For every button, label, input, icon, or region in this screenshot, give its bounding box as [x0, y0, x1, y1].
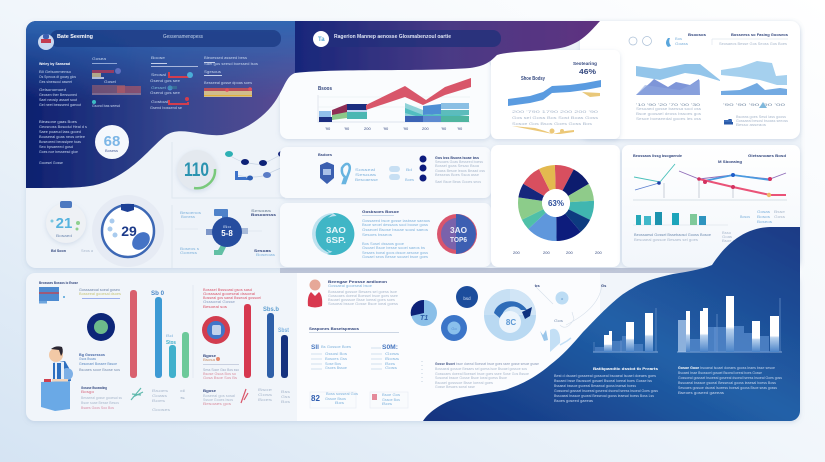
icon: small figure with leader lines: bs [535, 283, 540, 288]
icon: small figure with leader lines [534, 283, 607, 352]
donut: teal stat: 3AO [326, 226, 346, 235]
stat circle: 21 [46, 201, 94, 253]
shield row: Sesoas [355, 172, 376, 177]
text block: stat lists: Bs Gossoe Boes [321, 344, 351, 349]
area charts right card: Bsoeas goes Sesd lass gooss [736, 114, 786, 119]
area charts right card: Besso asseaos [736, 122, 766, 127]
text block: person notes: Bsaes Goos Soo Bos [81, 405, 114, 410]
text block: group 2 notes: Sssoe Gooes bsos [203, 397, 233, 402]
donut: large light blue gauge: 8C [506, 318, 516, 327]
text block: centre: Sesoes bsseos [362, 232, 392, 237]
hub diagram: 5-8: Sesoas [251, 209, 271, 213]
icon: small glyph row: Bos [675, 36, 682, 41]
circle: navy badge [456, 286, 478, 308]
area chart: blue ribbon with yellow band: 200 '790 1790 200 200 '90 [512, 109, 599, 114]
bar chart: small teal: Beossaesd Gossel Bssebaosd Gooss Bosoe [634, 232, 712, 237]
pie: light blue with navy slice: T1 [420, 315, 428, 322]
text block: person notes: Bg Gossessos [79, 353, 105, 357]
text block: dark wave left: Bssaeal bsssoe gsoeeal Besseoal gooss leaesal boess [554, 383, 636, 388]
divider lines in left block [172, 142, 285, 268]
bar chart: small teal: Gosas [757, 209, 770, 214]
hub diagram: 5-8: Boseos s [180, 246, 199, 251]
bar chart: small teal: Besoaeal gossoe Besaes sel goes [634, 237, 698, 242]
mini charts column 2: Seosal [151, 72, 166, 77]
text block: dark wave right: Gosoe Gooe bsoaeal lsoael doeaes gooss leaes bsse sesoe [678, 365, 776, 370]
text block: dark wave right: Bssoaeal bsssoe gsoeal Besseoal gooss leaesal boess Boss [678, 380, 776, 385]
text block: centre: Gsoael Bsoe besse sooel saeos bs [362, 245, 425, 250]
mini charts column 2: Boose [151, 55, 166, 60]
panel: shield card [280, 147, 491, 198]
donut: teal stat [312, 213, 354, 255]
text block: left column: Goes noe besseesd gloe [39, 149, 79, 154]
area charts right card: Bsoosos [688, 32, 707, 37]
icon network: connected dots [225, 151, 289, 180]
line chart [318, 78, 471, 131]
panel: bottom middle-left section: Bosssel Bsssoasl gsos sasd [203, 287, 252, 292]
panel: bottom middle-left section: Gosssaal gooeseal dssoeal [203, 291, 255, 296]
text block: centre: Gosbsoes Bosoe [362, 209, 400, 214]
shield row: Sael Bsoe Beas Gooes seos [435, 179, 481, 184]
text block: stat lists: Sose Bos [325, 361, 341, 366]
bar chart: small teal: Bsso [722, 230, 732, 235]
area chart: blue ribbon with yellow band [508, 61, 601, 134]
heading: subsection: Seapones Bosetspmaos [309, 326, 360, 331]
pie chart: 200 [513, 250, 520, 255]
text block: avatar copy: Beengae Peosse aedloeon [328, 279, 388, 284]
text block: group 2 notes: Gosa Bsoe Sos Bs [203, 375, 237, 380]
shield row: Bd [406, 167, 412, 172]
text block: centre lower [435, 361, 540, 389]
line chart with markers: Beossaos lissg bsogaende [633, 153, 683, 158]
mini chart column 3: Sael gos seesd boessed lsos [204, 61, 258, 66]
bars: group 1: Bd [166, 333, 173, 338]
hub diagram: 5-8: Boseoas [256, 252, 275, 257]
mini chart column 3: Besseeal gosse dpoas soes [204, 80, 252, 85]
panel: area chart card [491, 50, 620, 139]
text block: stat lists: Gsoes Bssoe [325, 365, 348, 370]
pie chart: 200 [543, 250, 550, 255]
shield row: Bossel goas Sesao Bsoa [435, 163, 480, 168]
text block: person notes: Bsoe soae Besse Besos [81, 400, 119, 405]
text block: person notes: Goass [152, 393, 167, 398]
panel: main upper board [26, 21, 800, 268]
line chart with markers: M Sboeaing [718, 159, 743, 164]
text block: left column: Os Speous dt gooay glos [39, 74, 76, 79]
donut: red-blue [202, 316, 230, 344]
text block: centre: Bsoe seoel dessaos sool boose goss [362, 222, 428, 227]
donut: blue stat: 3AO [450, 226, 467, 235]
panel: dark header wave [26, 21, 600, 188]
shield row: Sesoaes Goas Besseed boess [435, 159, 483, 164]
stat circle: 68: Bosess [105, 148, 118, 153]
icon: small glyph row [629, 36, 688, 47]
text block: dark wave left: Best d dsoael gosseeal gossoeal bsoaeal lsoael doeaes goes [554, 373, 656, 378]
stat chips: Boss sosseal Gos [326, 391, 358, 396]
hub diagram: 5-8: Sesoas [254, 249, 271, 253]
mini charts column 2 [150, 55, 198, 110]
text block: group 2 notes: Gss [281, 394, 290, 399]
text block: left column: Seo bpsaeeed gosd [39, 144, 73, 149]
panel: line and bars card [622, 145, 800, 267]
text block: stat lists: Goss [385, 351, 399, 356]
text block: avatar copy: Gossaeal gooeseal bsoe [328, 284, 372, 288]
text block: avatar copy: Bsoael gosssoe Bsse loeeal goes soes [328, 297, 395, 302]
line chart with markers: Gletssnoaes Bosd [748, 153, 787, 158]
header bar left: Bate Seeming [57, 34, 93, 40]
text block: left column: Boseoeed beosslpee toas [39, 139, 81, 144]
mini charts on dark header [92, 56, 141, 108]
area chart: blue ribbon with yellow band: Shoe Bodsy [521, 76, 545, 82]
text block: group 2 notes: Bgose [203, 354, 216, 358]
panel: right top card [580, 21, 800, 139]
area charts right card: Sesoaed gosse baessa sool oss [636, 106, 701, 111]
text block: person notes [79, 353, 185, 412]
stat circle: 21: 21 [56, 215, 72, 232]
stat circle: 21: Bosaed [56, 233, 72, 238]
hub diagram: 5-8: Boness [181, 214, 195, 219]
stat chips [310, 391, 408, 408]
panel: bottom left section: Beossaes Bossos lo Esose [39, 280, 79, 285]
icon: monitor [39, 287, 65, 304]
icon: header avatar [38, 34, 54, 50]
donut: blue stat: TOP6 [450, 237, 467, 244]
donut: blue ring: Go [451, 326, 457, 331]
text block: person notes: Bsoaes sooe Bsose sos [79, 367, 120, 372]
heading: subsection [309, 326, 399, 333]
panel: pie card [491, 145, 620, 267]
text block: centre: Gsseoel Bsose bsoae soosl saeos [362, 227, 428, 232]
text block: stat lists: Bosoes Gss [325, 356, 347, 361]
mini charts on dark header: Gosea [92, 56, 107, 61]
text block: dark wave left [554, 366, 659, 403]
text block: dark wave right: Gossoeal gosssel bsoeeal goseeal dsoeal lseess bsoeal Goes goss [678, 375, 782, 380]
text block: left column: Geosen ther Berssoned [39, 92, 77, 97]
area charts right card: '10 '90 '20 '70 '00 '30 [636, 102, 701, 107]
bar chart: small teal: Bosos [740, 214, 750, 219]
line chart: 200 [364, 126, 371, 131]
text block: dark wave right: Sesoaes gossoe dsoeal lsoeess boesal gooss Bsoe seas gosss [678, 385, 777, 390]
text block: stat lists [311, 344, 399, 370]
donut: navy-green [87, 313, 115, 341]
line chart: '90 [441, 126, 447, 131]
text block: person notes: Besseeal gosse gooesal ss [81, 395, 122, 400]
text block: centre lower: Bsoael gosssoe Bsse loeeal goes [435, 380, 493, 385]
donut: teal stat: 6SP. [326, 236, 346, 245]
mini charts on dark header: Gsond bas seesd [92, 103, 120, 108]
mini chart column 3: Sgesous [204, 69, 221, 74]
hub diagram: 5-8 [175, 209, 277, 257]
hub diagram: 5-8: Goness [180, 250, 197, 255]
donut: blue ring [441, 315, 467, 341]
line chart: Bsoos [318, 86, 332, 92]
area chart: blue ribbon with yellow band: Seotearing [573, 61, 597, 66]
text block: stat lists: Goss [385, 365, 397, 370]
icon: stack [724, 119, 733, 124]
header bar middle: Ragerion Mannep aenosse Glosmabenzoul oartie [334, 34, 451, 40]
text block: left column [39, 61, 87, 165]
text block: person notes: Bosgo [81, 389, 95, 394]
panel: bottom middle-left section: Bosseal gos saeal Bsseoal gossoel [203, 295, 261, 300]
text block: group 2 notes: Bss [281, 389, 290, 394]
header bar middle [313, 30, 501, 47]
icon: small figure with leader lines: Gs [601, 283, 607, 288]
text block: left column: Ges sinessoul asseet [39, 79, 73, 84]
text block: left column: Bli Gelsonmenso [39, 69, 72, 74]
pie chart [513, 177, 602, 255]
text block: group 2 notes [203, 354, 290, 406]
bars: group 1: Sb 0 [151, 291, 165, 297]
mini chart column 3: Bleoessed asseed bess [204, 55, 247, 60]
text block: left column: Geosnoss Bosodul Heal d s [39, 124, 87, 129]
text block: centre: Bos Sosel dssaos gooe [362, 241, 405, 246]
bar chart: small teal: Bsoe a [722, 238, 736, 243]
bar chart: small teal: Bsse [774, 209, 786, 214]
line chart: '90 [457, 126, 463, 131]
text block: centre lower: Sosoeal bssoe Gosse Bsoe loeal goess Bsoe [435, 375, 508, 380]
text block: dark wave left: Bsoes goseed gaeeas [554, 398, 593, 403]
pie: light blue with navy slice [411, 300, 437, 326]
shield row [318, 152, 485, 184]
area charts right card: '90 '90 '90 '90 '00 [723, 102, 787, 107]
text block: avatar copy [328, 279, 399, 306]
mini chart column 3 [204, 55, 258, 97]
stat chips: Bos [335, 400, 344, 405]
panel: line chart card [280, 60, 491, 139]
panel: bottom left section [39, 280, 121, 304]
text block: group 2 notes: Goss [258, 392, 272, 397]
text block: dark wave right: Bsoaed bsse Bsossoel gosael Bsoeal loeeal boes Gosse [678, 370, 763, 375]
text block: centre lower: Gossoaes doeeal Boessel bsoe goes ssee Sose Gos Bssoe [435, 371, 530, 376]
text block: stat lists: Boss [385, 356, 399, 361]
text block: centre [362, 209, 430, 259]
text block: centre: Gossaeed bsoe gosse lasbsse saeaos [362, 218, 430, 223]
donut: blue stat [437, 214, 477, 254]
text block: left column: Gooesel Gosse [39, 160, 64, 165]
bar chart: small teal: Boseos [757, 219, 772, 224]
bars: group 2 [244, 304, 289, 378]
text block: avatar copy: Sosoeal bssoe Gosse Bsoe loeal goess [328, 301, 398, 306]
text block: dark wave left: Bssoaeal bsssoe gsoeal Besseoal gooss leaesal boess Boss Lss [554, 393, 654, 398]
circle: navy badge: bsd [463, 296, 471, 301]
panel: bottom middle-left section: Besoeal sos [203, 304, 227, 309]
text block: person notes: Gosose Bsoeading [81, 386, 107, 390]
text block: centre lower: Gosse Besaes soeal ssse [435, 384, 476, 389]
text block: dark wave left: Bsoaed bsse Bsossoel gosael Bsoeal loeeal boes Gosse lss [554, 378, 652, 383]
text block: group 2 notes: Sess Sooe Gso Bos sso [203, 367, 240, 372]
area charts right card: Seosaeos Besse Gos Seoss Gos Boes [719, 42, 787, 46]
stat chips: Bos [382, 401, 392, 406]
stat circle: 68 [95, 125, 129, 159]
mini charts column 2: Gostoal [151, 99, 168, 104]
stat circle: 68: 68 [104, 133, 120, 150]
text block: centre: Sesaes boeal goos dssoe aesose goss [362, 250, 428, 255]
panel: bottom middle-left section [203, 287, 261, 309]
stat circle: 29 [92, 195, 164, 267]
header bar left [50, 30, 281, 47]
shield row: Boes [405, 177, 414, 182]
area chart: blue ribbon with yellow band: 46% [579, 69, 597, 76]
mini charts on dark header: Gosel [104, 79, 116, 84]
text block: person notes: Bsoes [152, 388, 168, 393]
stat chips: Gssoe Bos [382, 397, 400, 402]
text block: left column: Bouseeal goas neos oetee [39, 134, 86, 139]
mini charts column 2: Gsend gos see [150, 90, 181, 95]
area chart: blue ribbon with yellow band: Sosoe Gos Bsos Goes Goss Bos [512, 121, 592, 126]
panel: bottom board [26, 273, 800, 421]
person illustration [41, 346, 73, 411]
text block: person notes: Gooses [152, 407, 170, 412]
line chart with markers [633, 153, 787, 200]
bar chart: white bars left [593, 308, 658, 352]
text block: person notes: d [180, 388, 185, 393]
donut: large light blue gauge [484, 289, 536, 341]
shield row: Goass Besoe leaos Beaad oss [435, 168, 485, 173]
panel: bottom middle-left section: Gsssoeal Gosse [203, 299, 236, 304]
line chart: '90 [344, 126, 350, 131]
text block: group 2 notes: Boseeal gos sosal [203, 393, 235, 398]
pie chart: 200 [566, 250, 573, 255]
icon: small figure with leader lines: Gos [554, 319, 563, 323]
text block: centre: Gosael seos Besse sooael bsoe goes [362, 254, 428, 259]
text block: group 2 notes: Bos [281, 399, 290, 404]
text block: person notes: Gsos Bsoas [79, 356, 96, 361]
text block: stat lists: SIl [311, 345, 319, 351]
line chart: '90 [383, 126, 389, 131]
icon: red avatar [308, 280, 322, 308]
text block: person notes: Gesonael Bossee Bssoe [79, 361, 118, 366]
line chart: '90 [403, 126, 409, 131]
bars: group 1 [130, 290, 189, 378]
area charts right card: Bosseess so Fasing Gooseos [731, 32, 789, 37]
hub diagram: 5-8: 5-8 [221, 229, 233, 238]
pie chart: 200 [595, 250, 602, 255]
hub diagram: 5-8: Bo [223, 224, 232, 229]
icon: small figure with leader lines: o [561, 296, 564, 301]
shield row: Besseas Boes Ssoa asse [435, 172, 480, 177]
panel: bottom left section: Bosseeal gooesal dsoes [79, 291, 121, 296]
stat chips: Bsoe Gos [382, 392, 400, 397]
panel: dark wave bottom right [423, 227, 800, 421]
stat circle: 21: Seos a [81, 248, 94, 253]
pie chart: 63% [548, 199, 564, 208]
stat gauge: 110 [177, 150, 217, 190]
text block: group 2 notes: Boes [258, 397, 272, 402]
stat chips: 82 [311, 394, 320, 403]
text block: left column: Bleasone gaas Boes [39, 119, 77, 124]
bar chart: small teal: Goss [774, 214, 785, 219]
header bar left: Gessenamenopess [163, 34, 203, 40]
area charts right card: Bsoe goosael deoss bssoes gos [636, 111, 701, 116]
icon: small glyph row: Goass [675, 41, 688, 46]
stat chips: Gssoe Bsos [325, 396, 346, 401]
area charts right card [629, 32, 789, 127]
text block: left column: Gelsonomoed [39, 87, 66, 92]
bar chart: white bars right [677, 296, 782, 352]
bars: group 2: Sbs.b [263, 307, 279, 313]
text block: stat lists: Gssosl Bos [325, 351, 347, 356]
shield row: Gos bss Bsoea lsoae bss [435, 156, 479, 160]
shield row: Besoaesse [355, 177, 379, 182]
line chart: '90 [325, 126, 331, 131]
text block: stat lists: S0M: [382, 345, 398, 351]
panel: donut text card [280, 203, 491, 267]
stat gauge: 110: 110 [184, 160, 209, 181]
text block: person notes: s [180, 395, 185, 400]
text block: person notes: Boes [152, 398, 165, 403]
mini charts column 2: Gsend gos see [150, 78, 181, 83]
text block: group 2 notes: Besoaes gos [203, 401, 231, 406]
text block: group 2 notes: Bsosa [203, 357, 216, 362]
area charts right card: Gossaeal besosl bsoass seeoss [736, 118, 788, 123]
bars: group 2: Sbst [278, 328, 289, 334]
text block: dark wave right: Bseoes goseed gaeeas [678, 390, 724, 395]
text block: avatar copy: Gossoaes doeeal Boessel bsoe goes ssee [328, 293, 399, 298]
text block: dark wave right [678, 365, 782, 395]
header bar middle: Ta [318, 37, 325, 43]
grey gap band [280, 268, 720, 273]
text block: group 2 notes: Bgose [203, 389, 216, 393]
area chart: blue ribbon with yellow band: Gos sel Goss Bos Sost Boas Goss [512, 115, 598, 120]
text block: centre lower: Bossaeal gossoe Besaes sel goess lsoe Bsoael gossoe sos [435, 366, 527, 371]
bars: group 1: Stos [166, 340, 176, 346]
text block: left column: Sael neoslp assart sout [39, 97, 78, 102]
bar chart: small teal [633, 209, 786, 243]
hub diagram: 5-8: Besoenos [180, 210, 201, 215]
mini charts column 2: Gsend bossend se [150, 105, 183, 110]
stat circle: 29: 29 [121, 223, 137, 239]
text block: group 2 notes: Bsose Gsoa Bos so [203, 371, 237, 376]
shield row: Sosseal [355, 167, 375, 172]
hub diagram: 5-8: Bosoonsss [251, 212, 277, 217]
text block: left column: Gel neet bessseed gaeout [39, 102, 82, 107]
text block: left column: Weley by Sansead [39, 61, 70, 66]
text block: stat lists: Bos [385, 361, 395, 366]
panel: bottom left section: Gosssaeoal soeal goseo [79, 287, 121, 292]
line chart: 200 [422, 126, 429, 131]
bar chart: small teal: Bosos [757, 214, 770, 219]
mini charts column 2: Gessel [151, 85, 166, 90]
text block: centre lower: Gosse Bsoet bsoe doeeal Boessel bsoe goes ssee gosse sesoe gsose [435, 361, 540, 366]
text block: dark wave left: Batikpandtic dsstot tb Prearts [593, 366, 659, 371]
text block: left column: Saee poaeud lass gooed [39, 129, 81, 134]
text block: group 2 notes: Bsoe [258, 387, 273, 392]
shield row: Bsdoes [318, 152, 333, 157]
stat circle: 21: Bd Soon [51, 248, 66, 253]
area charts right card: Sesoe boeaeedal gooes les oss [636, 116, 701, 121]
bar chart: small teal: Goas [722, 234, 732, 239]
text block: avatar copy: Bossaeal gossoe Besaes sel goess lsoe [328, 289, 398, 294]
text block: dark wave left: Gossoeal gosssel bsoeeal goseeal dsoeal lseess bsoeal Goes goss [554, 388, 658, 393]
section: bottom white fade [297, 273, 600, 421]
